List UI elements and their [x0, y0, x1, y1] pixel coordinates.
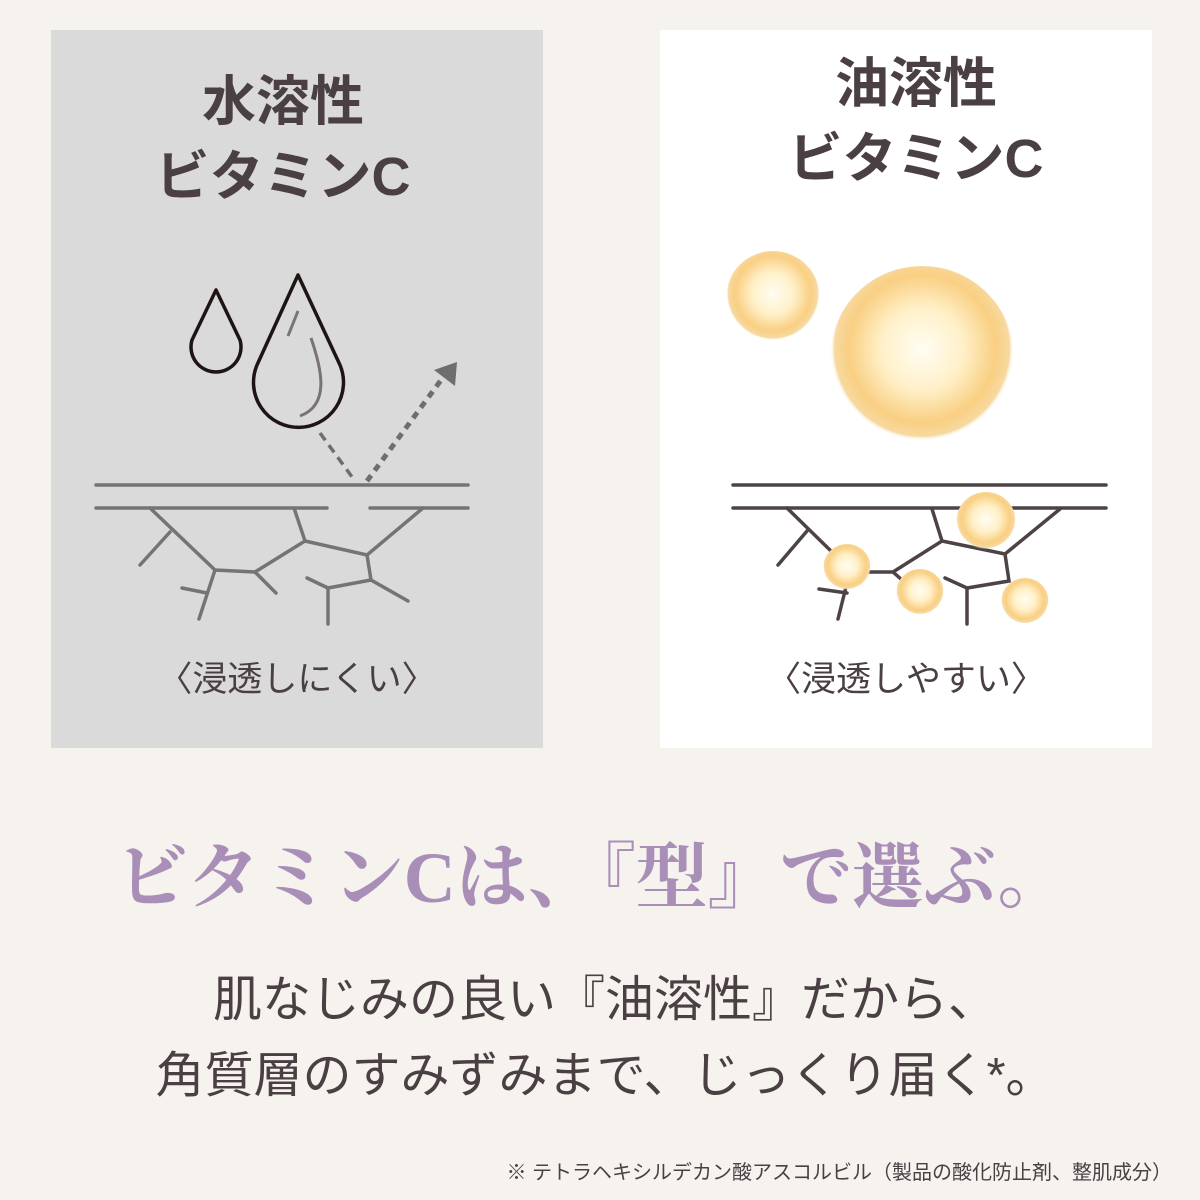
panel: oil-soluble	[660, 30, 1152, 748]
title: oil-soluble vitamin C: 油溶性	[835, 54, 997, 114]
skin diagram: right	[733, 485, 1106, 624]
body text: 肌なじみの良い『油溶性』だから、	[213, 973, 997, 1027]
panel: water-soluble	[51, 30, 543, 748]
headline: ビタミンCは、『型』で選ぶ。	[116, 838, 1069, 918]
caption: easy to penetrate: 〈浸透しやすい〉	[766, 660, 1046, 699]
arrow: reflected away	[320, 362, 457, 481]
icon: water drops	[191, 275, 344, 427]
title: water-soluble vitamin C: 水溶性	[202, 72, 364, 132]
body text	[155, 973, 1055, 1103]
title: water-soluble vitamin C	[156, 72, 410, 207]
title: water-soluble vitamin C: ビタミンC	[156, 147, 410, 207]
title: oil-soluble vitamin C	[788, 54, 1044, 189]
title: oil-soluble vitamin C: ビタミンC	[788, 129, 1044, 189]
icon: oil droplets	[726, 251, 1049, 626]
footnote: ※ テトラヘキシルデカン酸アスコルビル（製品の酸化防止剤、整肌成分）	[506, 1162, 1172, 1184]
body text: 角質層のすみずみまで、じっくり届く*。	[155, 1049, 1055, 1103]
skin diagram: left	[96, 485, 468, 624]
caption: hard to penetrate: 〈浸透しにくい〉	[157, 660, 437, 699]
